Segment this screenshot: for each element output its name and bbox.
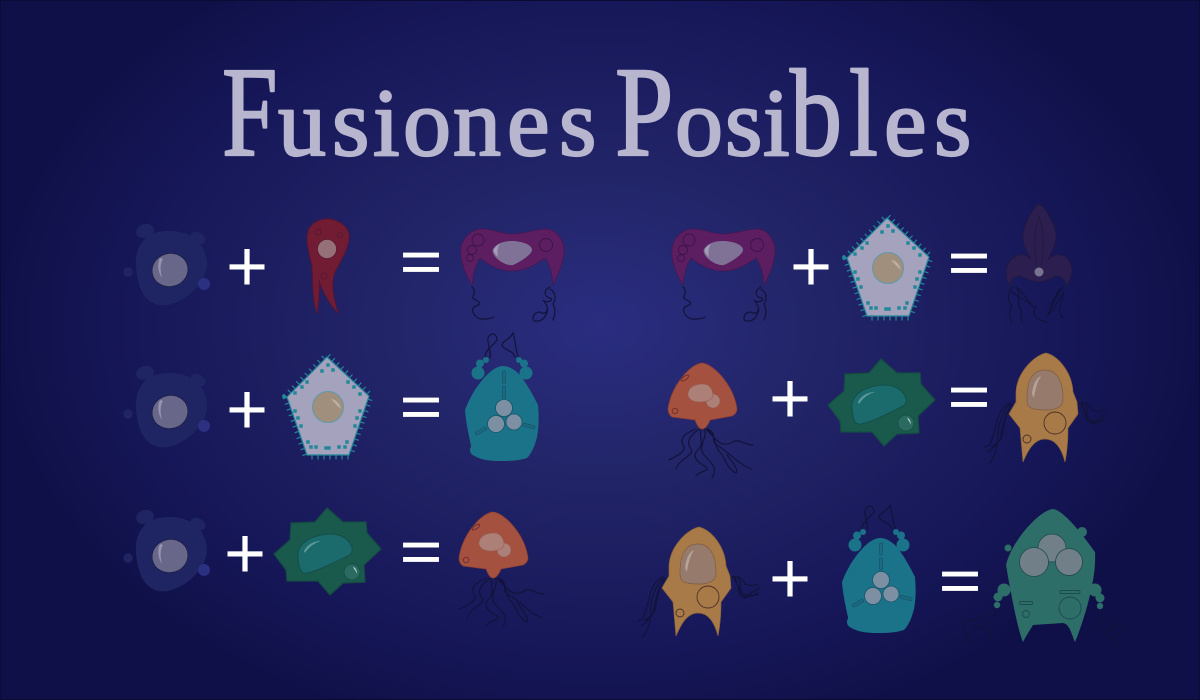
- equals sign: =: [939, 548, 981, 613]
- equation 6: right row 3: [638, 505, 1127, 650]
- creature: pentagon cell: [847, 218, 929, 316]
- creature: red-orange cell: [668, 363, 753, 478]
- plus sign: +: [769, 359, 811, 439]
- creature: blue cell: [123, 508, 210, 591]
- title: es: [884, 69, 971, 176]
- creature: purple fusion: [461, 229, 564, 321]
- creature: purple cell: [672, 229, 775, 321]
- creature: dark purple fusion: [1006, 204, 1072, 323]
- equals sign: =: [948, 230, 990, 295]
- equation 2: left row 2: [123, 333, 539, 461]
- creature: pentagon cell: [287, 357, 369, 455]
- plus sign: +: [769, 539, 811, 619]
- equals sign: =: [400, 229, 442, 294]
- equation 4: right row 1: [672, 204, 1072, 323]
- title: P: [615, 42, 673, 183]
- title: usiones: [278, 69, 596, 176]
- plus sign: +: [790, 227, 832, 307]
- creature: orange fusion: [985, 353, 1106, 463]
- creature: green star cell: [828, 359, 935, 446]
- equals sign: =: [400, 374, 442, 439]
- title: l: [849, 45, 878, 182]
- plus sign: +: [224, 514, 266, 594]
- equals sign: =: [948, 364, 990, 429]
- creature: blue cell: [123, 364, 210, 447]
- plus sign: +: [226, 227, 268, 307]
- creature: orange cell: [638, 527, 759, 637]
- equation 1: left row 1: [123, 219, 564, 321]
- title: [222, 41, 971, 183]
- creature: red cell: [307, 219, 349, 313]
- creature: teal cell: [842, 505, 916, 633]
- creature: blue cell: [123, 222, 210, 305]
- creature: large green fusion: [963, 509, 1127, 650]
- plus sign: +: [226, 370, 268, 450]
- creature: green star cell: [274, 508, 381, 595]
- creature: red-orange fusion: [459, 512, 544, 627]
- title: b: [790, 45, 842, 182]
- title: osi: [675, 69, 790, 176]
- equals sign: =: [400, 519, 442, 584]
- equation 3: left row 3: [123, 508, 544, 627]
- title: F: [222, 41, 278, 183]
- equation 5: right row 2: [668, 353, 1106, 478]
- creature: teal fusion: [465, 333, 539, 461]
